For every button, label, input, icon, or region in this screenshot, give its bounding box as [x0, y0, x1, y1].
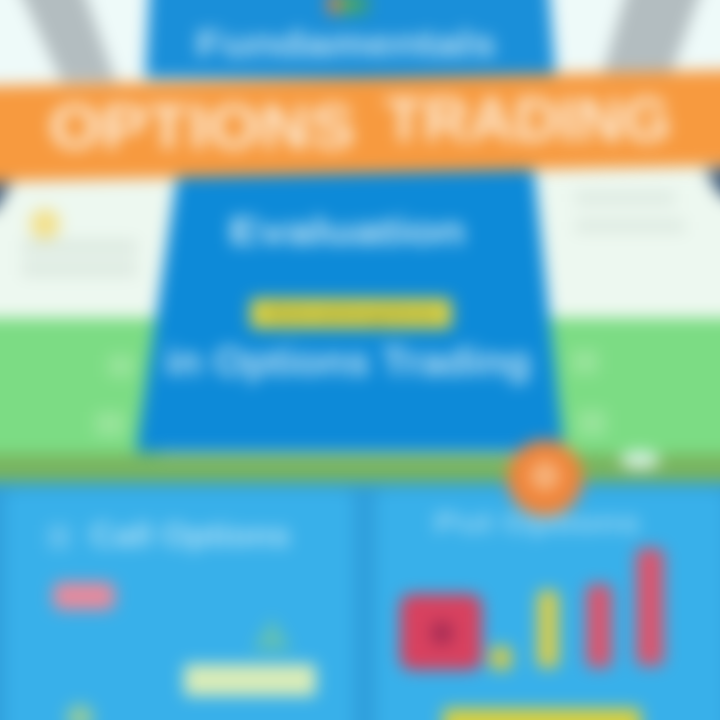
bar chart: [400, 548, 664, 670]
panel: left light background: [0, 170, 180, 320]
highlight: yellow pill: [250, 298, 452, 329]
panel: center blue: [136, 170, 564, 452]
icon: left grey ribbon: [15, 0, 116, 82]
icon: bottom-left mark: [66, 704, 94, 720]
icon: top logo: [328, 0, 368, 14]
panel: right light background: [530, 170, 720, 320]
icon: banner left fold: [0, 182, 12, 212]
heading: evaluation: Evaluation: [229, 211, 465, 253]
banner: orange title band: [0, 70, 720, 182]
title: TRADING: [385, 86, 671, 155]
icon: left field marks: [95, 355, 134, 436]
panel: left green field: [0, 318, 160, 468]
divider band: olive: [0, 454, 720, 482]
label: bottom yellow bar: [443, 708, 641, 720]
panel: right green field: [540, 318, 720, 468]
label: pale yellow block: [184, 664, 316, 696]
icon: right field marks: [572, 350, 606, 436]
highlight: yellow pill: Strategies: [266, 301, 436, 326]
panel: top blue title: [145, 0, 556, 78]
heading: top: Fundamentals: [196, 23, 496, 64]
icon: orange circle badge: [507, 440, 583, 516]
icon: right grey ribbon: [600, 0, 705, 82]
panel: right card: [376, 490, 720, 720]
heading: left card: Call Options: [90, 517, 290, 553]
title: OPTIONS: [49, 93, 355, 162]
heading: right card: Put Options: [434, 507, 640, 538]
title: [49, 86, 671, 162]
subheading: in options trading: in Options Trading: [165, 340, 531, 384]
background: top sky: [0, 0, 720, 90]
panel: left card: [5, 490, 353, 720]
icon: sun: [30, 209, 60, 239]
panel: bottom blue: [0, 482, 720, 720]
icon: banner right fold: [705, 165, 720, 205]
icon: white mark: [620, 451, 660, 469]
text block: right pale lines: [575, 192, 685, 232]
label: pink pill: [53, 582, 115, 610]
icon: green triangle: [252, 618, 292, 650]
text block: left pale lines: [22, 240, 137, 276]
icon: small square: [48, 525, 70, 549]
